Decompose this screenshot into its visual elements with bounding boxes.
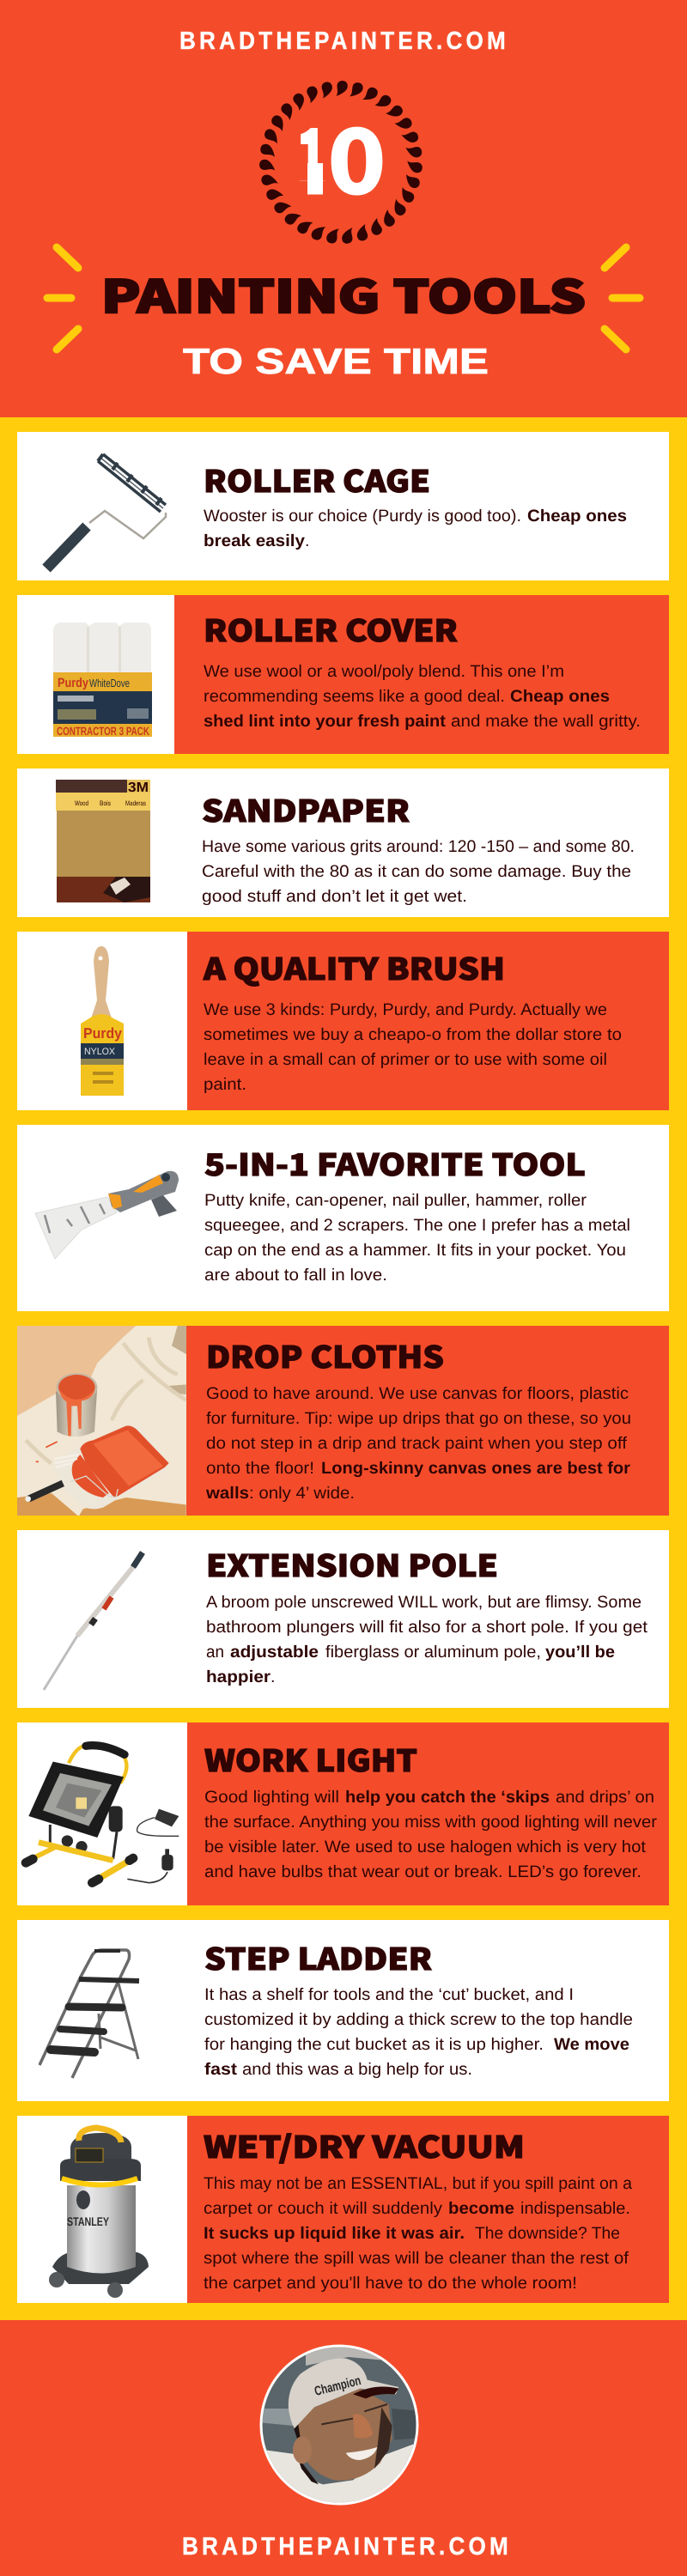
body text: leave in a small can of primer or to use with some oil [204, 1050, 607, 1069]
body text: paint. [204, 1075, 246, 1094]
body text: the carpet and you'll have to do the whole room! [204, 2274, 577, 2293]
header band [0, 0, 687, 417]
heading: DROP CLOTHS [206, 1334, 444, 1377]
body text: and this was a big help for us. [242, 2060, 472, 2079]
body text: squeegee, and 2 scrapers. The one I prefer has a metal [204, 1216, 630, 1235]
heading: STEP LADDER [204, 1935, 432, 1979]
panel: roller cover [17, 595, 669, 754]
panel: sandpaper [17, 769, 669, 917]
portrait [259, 2344, 419, 2506]
sunburst rays [47, 247, 640, 349]
panel: work light [17, 1722, 669, 1905]
body text: Careful with the 80 as it can do some damage. Buy the [202, 862, 631, 881]
body text: for furniture. Tip: wipe up drips that go on these, so you [206, 1409, 631, 1428]
body text [204, 1788, 658, 1881]
body text: shed lint into your fresh paint [204, 712, 447, 731]
heading: WET/DRY VACUUM [204, 2123, 525, 2167]
body text: for hanging the cut bucket as it is up higher. [204, 2035, 544, 2054]
heading: SANDPAPER [202, 787, 410, 831]
ring of paint drops [259, 81, 423, 244]
body text: happier [206, 1668, 271, 1686]
body text: Have some various grits around: 120 -150 – and some 80. [202, 837, 635, 856]
body text: Wooster is our choice (Purdy is good too). [204, 507, 521, 526]
site name top: BRADTHEPAINTER.COM [179, 27, 506, 55]
panel: extension pole [17, 1530, 669, 1708]
site name bottom: BRADTHEPAINTER.COM [182, 2533, 508, 2561]
body text: break easily [204, 532, 305, 550]
body text: and make the wall gritty. [451, 712, 641, 731]
heading: EXTENSION POLE [206, 1542, 498, 1586]
body text: you’ll be [545, 1643, 615, 1662]
icon: wet/dry vacuum [49, 2128, 149, 2298]
body text: It has a shelf for tools and the ‘cut’ bucket, and I [204, 1985, 574, 2004]
body text: indispensable. [520, 2199, 630, 2218]
body text: A broom pole unscrewed WILL work, but are flimsy. Some [206, 1593, 641, 1612]
body text: bathroom plungers will fit also for a short pole. If you get [206, 1618, 648, 1637]
icon: roller cover pack [53, 623, 152, 738]
body text: The downside? The [475, 2224, 620, 2243]
icon: paint brush: NYLOX [84, 1047, 116, 1057]
body text: be visible later. We used to use halogen which is very hot [204, 1838, 647, 1856]
icon: sandpaper pack: Bois [100, 799, 111, 807]
icon: step ladder [40, 1950, 139, 2078]
body text: walls [205, 1484, 249, 1503]
panel: quality brush [17, 932, 669, 1110]
subtitle: TO SAVE TIME [183, 341, 489, 381]
body text: fiberglass or aluminum pole, [325, 1643, 541, 1662]
icon: extension pole [44, 1552, 143, 1690]
title: PAINTING TOOLS [101, 261, 586, 325]
body text [204, 1191, 630, 1285]
icon: 5-in-1 tool [35, 1171, 179, 1259]
panel: 5-in-1 tool [17, 1125, 669, 1311]
body text [204, 2174, 632, 2293]
body text: Putty knife, can-opener, nail puller, hammer, roller [204, 1191, 587, 1210]
body text [204, 662, 641, 731]
body text [205, 1384, 631, 1503]
body text: We move [554, 2035, 629, 2054]
body text: recommending seems like a good deal. [204, 687, 505, 706]
panel: roller cage [17, 432, 669, 580]
heading: ROLLER CAGE [204, 458, 430, 501]
icon: roller cover pack: WhiteDove [89, 677, 130, 690]
number 10 [290, 88, 386, 221]
body text: . [305, 532, 309, 550]
body text: . [271, 1668, 275, 1686]
body text: do not step in a drip and track paint when you step off [206, 1434, 628, 1453]
body text: onto the floor! [206, 1459, 314, 1478]
body text [206, 1593, 648, 1686]
body text: spot where the spill was will be cleaner than the rest of [204, 2249, 629, 2268]
icon: paint brush: Purdy [83, 1025, 123, 1042]
body text: This may not be an ESSENTIAL, but if you spill paint on a [204, 2174, 632, 2193]
panel: drop cloths [17, 1326, 669, 1516]
icon: work light [26, 1746, 179, 1883]
icon: sandpaper pack [56, 780, 150, 902]
icon: paint brush [81, 946, 124, 1096]
icon: sandpaper pack: Wood [75, 799, 88, 807]
heading: WORK LIGHT [204, 1737, 417, 1781]
icon: sandpaper pack: 3M [128, 781, 149, 795]
number 10: 1 [295, 88, 328, 221]
body text: good stuff and don’t let it get wet. [202, 887, 467, 906]
body text [202, 837, 635, 906]
body text [204, 1985, 633, 2079]
body text: We use 3 kinds: Purdy, Purdy, and Purdy. Actually we [204, 1000, 607, 1019]
body text: : only 4’ wide. [249, 1484, 355, 1503]
portrait: Champion [313, 2372, 362, 2398]
heading: ROLLER COVER [204, 607, 458, 651]
number 10: 0 [327, 88, 386, 221]
body text: an [206, 1643, 224, 1662]
body text: the surface. Anything you miss with good lighting will never [204, 1813, 658, 1832]
body text: cap on the end as a hammer. It fits in your pocket. You [204, 1241, 626, 1260]
icon: roller cage [46, 454, 166, 568]
body text: carpet or couch it will suddenly [204, 2199, 442, 2218]
body text: sometimes we buy a cheapo-o from the dollar store to [204, 1025, 622, 1044]
icon: sandpaper pack: Maderas [125, 799, 146, 807]
body text: Cheap ones [527, 507, 627, 526]
body text: and drips’ on [556, 1788, 654, 1807]
panel: wet/dry vacuum [17, 2116, 669, 2303]
panel: step ladder [17, 1920, 669, 2101]
body text: customized it by adding a thick screw to the top handle [204, 2010, 633, 2029]
body text: Long-skinny canvas ones are best for [321, 1459, 630, 1478]
body text: adjustable [230, 1643, 319, 1662]
body text: Cheap ones [510, 687, 610, 706]
body text: Good to have around. We use canvas for floors, plastic [206, 1384, 629, 1403]
body text: fast [204, 2060, 238, 2079]
icon: roller cover pack: CONTRACTOR 3 PACK [57, 725, 149, 738]
body text: help you catch the ‘skips [345, 1788, 550, 1807]
footer band [0, 2320, 687, 2576]
illustration: drop cloth, paint can and tray [17, 1326, 189, 1516]
body text [204, 1000, 622, 1094]
icon: roller cover pack: Purdy [58, 676, 89, 690]
body text: are about to fall in love. [204, 1266, 387, 1285]
body text [204, 507, 627, 550]
body text: become [448, 2199, 514, 2218]
heading: 5-IN-1 FAVORITE TOOL [204, 1141, 586, 1185]
heading: A QUALITY BRUSH [203, 945, 505, 989]
body text: and have bulbs that wear out or break. LED’s go forever. [204, 1862, 641, 1881]
body text: We use wool or a wool/poly blend. This one I’m [204, 662, 564, 681]
body text: Good lighting will [204, 1788, 339, 1807]
body text: It sucks up liquid like it was air. [204, 2224, 465, 2243]
icon: wet/dry vacuum: STANLEY [67, 2215, 109, 2228]
